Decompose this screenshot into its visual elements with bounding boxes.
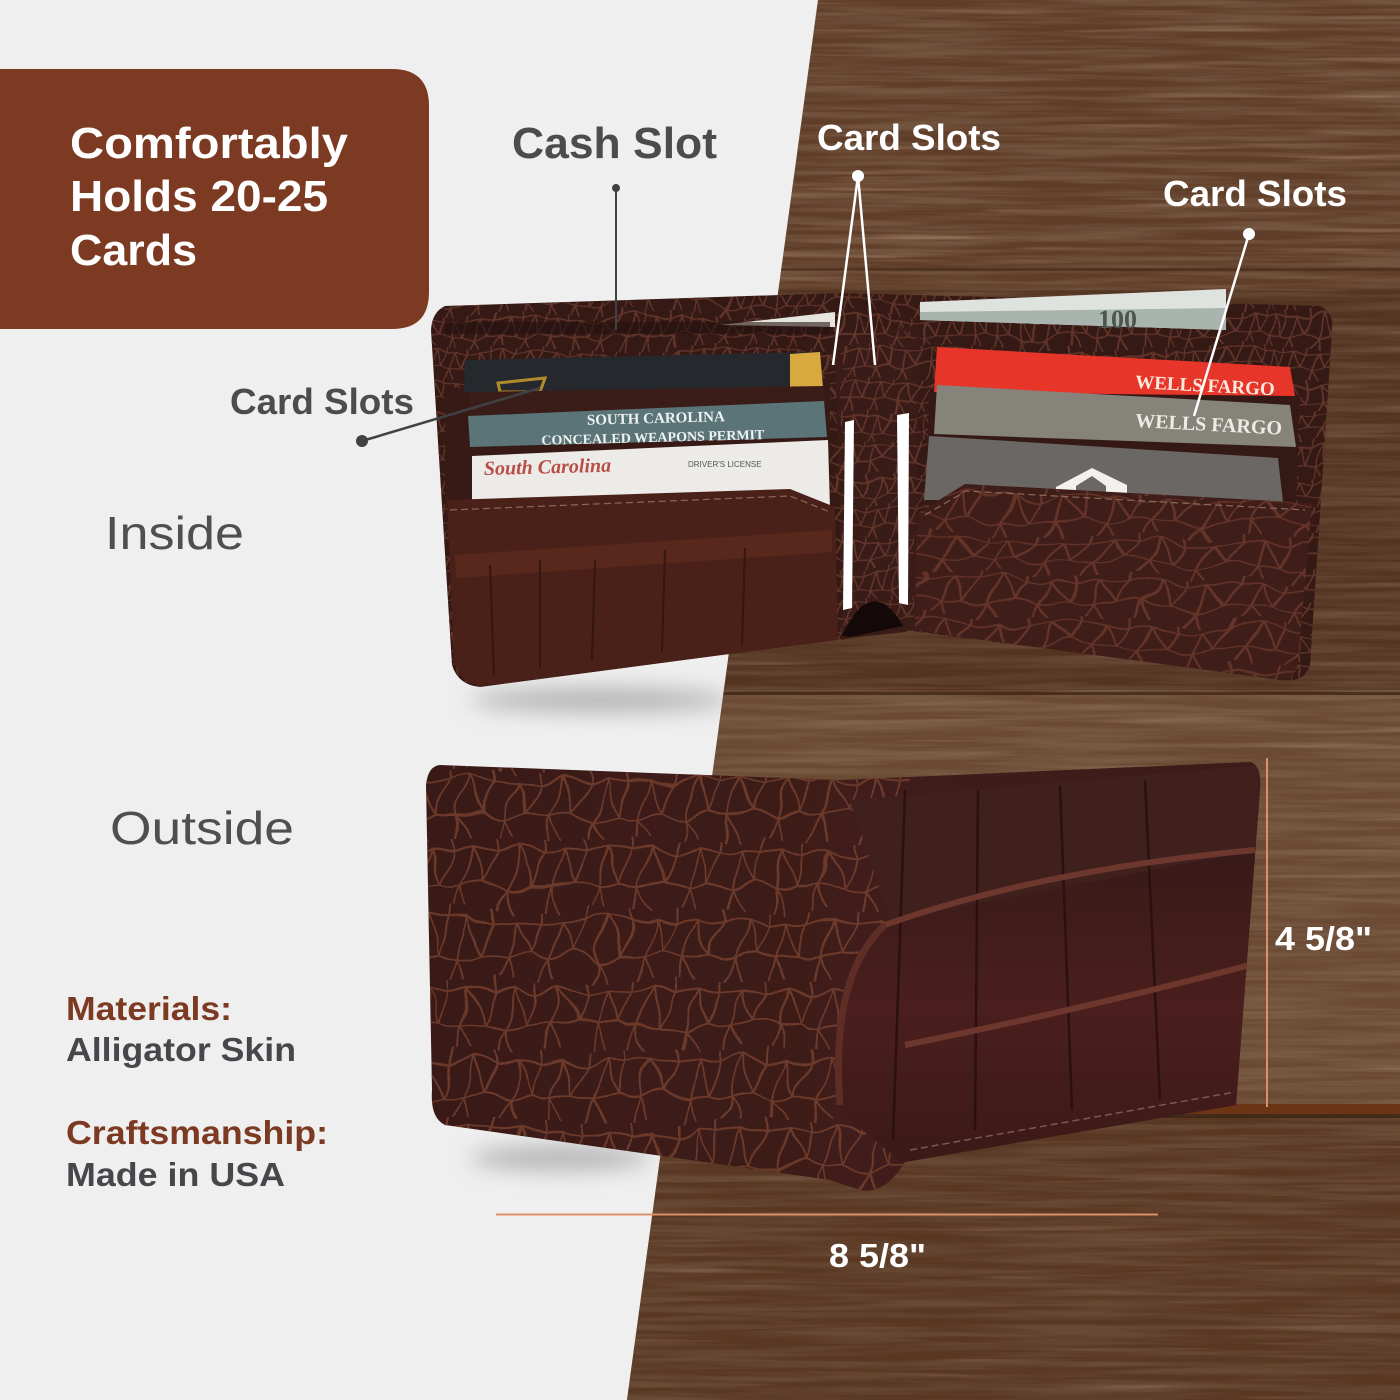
wallet: inside view: South Carolina xyxy=(484,455,611,480)
wallet: inside view: DRIVER'S LICENSE xyxy=(688,460,762,469)
dimension: width: 8 5/8" xyxy=(829,1237,926,1274)
wallet: inside view: 100 xyxy=(1098,305,1137,334)
title text: Comfortably xyxy=(70,119,349,168)
wood background panel xyxy=(600,0,1400,1400)
left cards xyxy=(445,378,830,505)
left card slots label: Card Slots xyxy=(230,381,414,422)
materials text block xyxy=(66,990,296,1068)
right cards xyxy=(925,388,1300,505)
wallet: outside view xyxy=(420,755,1260,1200)
right pocket xyxy=(912,484,1312,680)
materials text block: Alligator Skin xyxy=(66,1031,296,1068)
cash slot label: Cash Slot xyxy=(512,119,717,168)
center card slots label: Card Slots xyxy=(817,117,1001,158)
left pocket xyxy=(447,489,838,686)
materials text block: Materials: xyxy=(66,990,232,1027)
craftsmanship text block xyxy=(66,1114,328,1193)
title text: Holds 20-25 xyxy=(70,172,328,221)
callout: left card slots xyxy=(230,381,540,447)
wallet: inside view xyxy=(420,280,1340,712)
center spine xyxy=(835,325,920,640)
title text: Cards xyxy=(70,226,197,275)
inside label: Inside xyxy=(105,507,244,559)
callout: center card slots xyxy=(817,117,1001,365)
outside label: Outside xyxy=(110,802,294,854)
right card slots label: Card Slots xyxy=(1163,173,1347,214)
cash in slot xyxy=(720,312,835,327)
title badge xyxy=(0,69,429,329)
callout: right card slots xyxy=(1163,173,1347,416)
dimension: height: 4 5/8" xyxy=(1275,920,1372,957)
wallet: inside view: WELLS FARGO xyxy=(1135,410,1283,440)
wallet: inside view: SOUTH CAROLINA xyxy=(587,409,725,429)
callout: cash slot xyxy=(512,119,717,330)
craftsmanship text block: Craftsmanship: xyxy=(66,1114,328,1151)
wallet: inside view: WELLS FARGO xyxy=(1135,372,1275,400)
craftsmanship text block: Made in USA xyxy=(66,1156,285,1193)
wallet: inside view: CONCEALED WEAPONS PERMIT xyxy=(541,428,765,449)
